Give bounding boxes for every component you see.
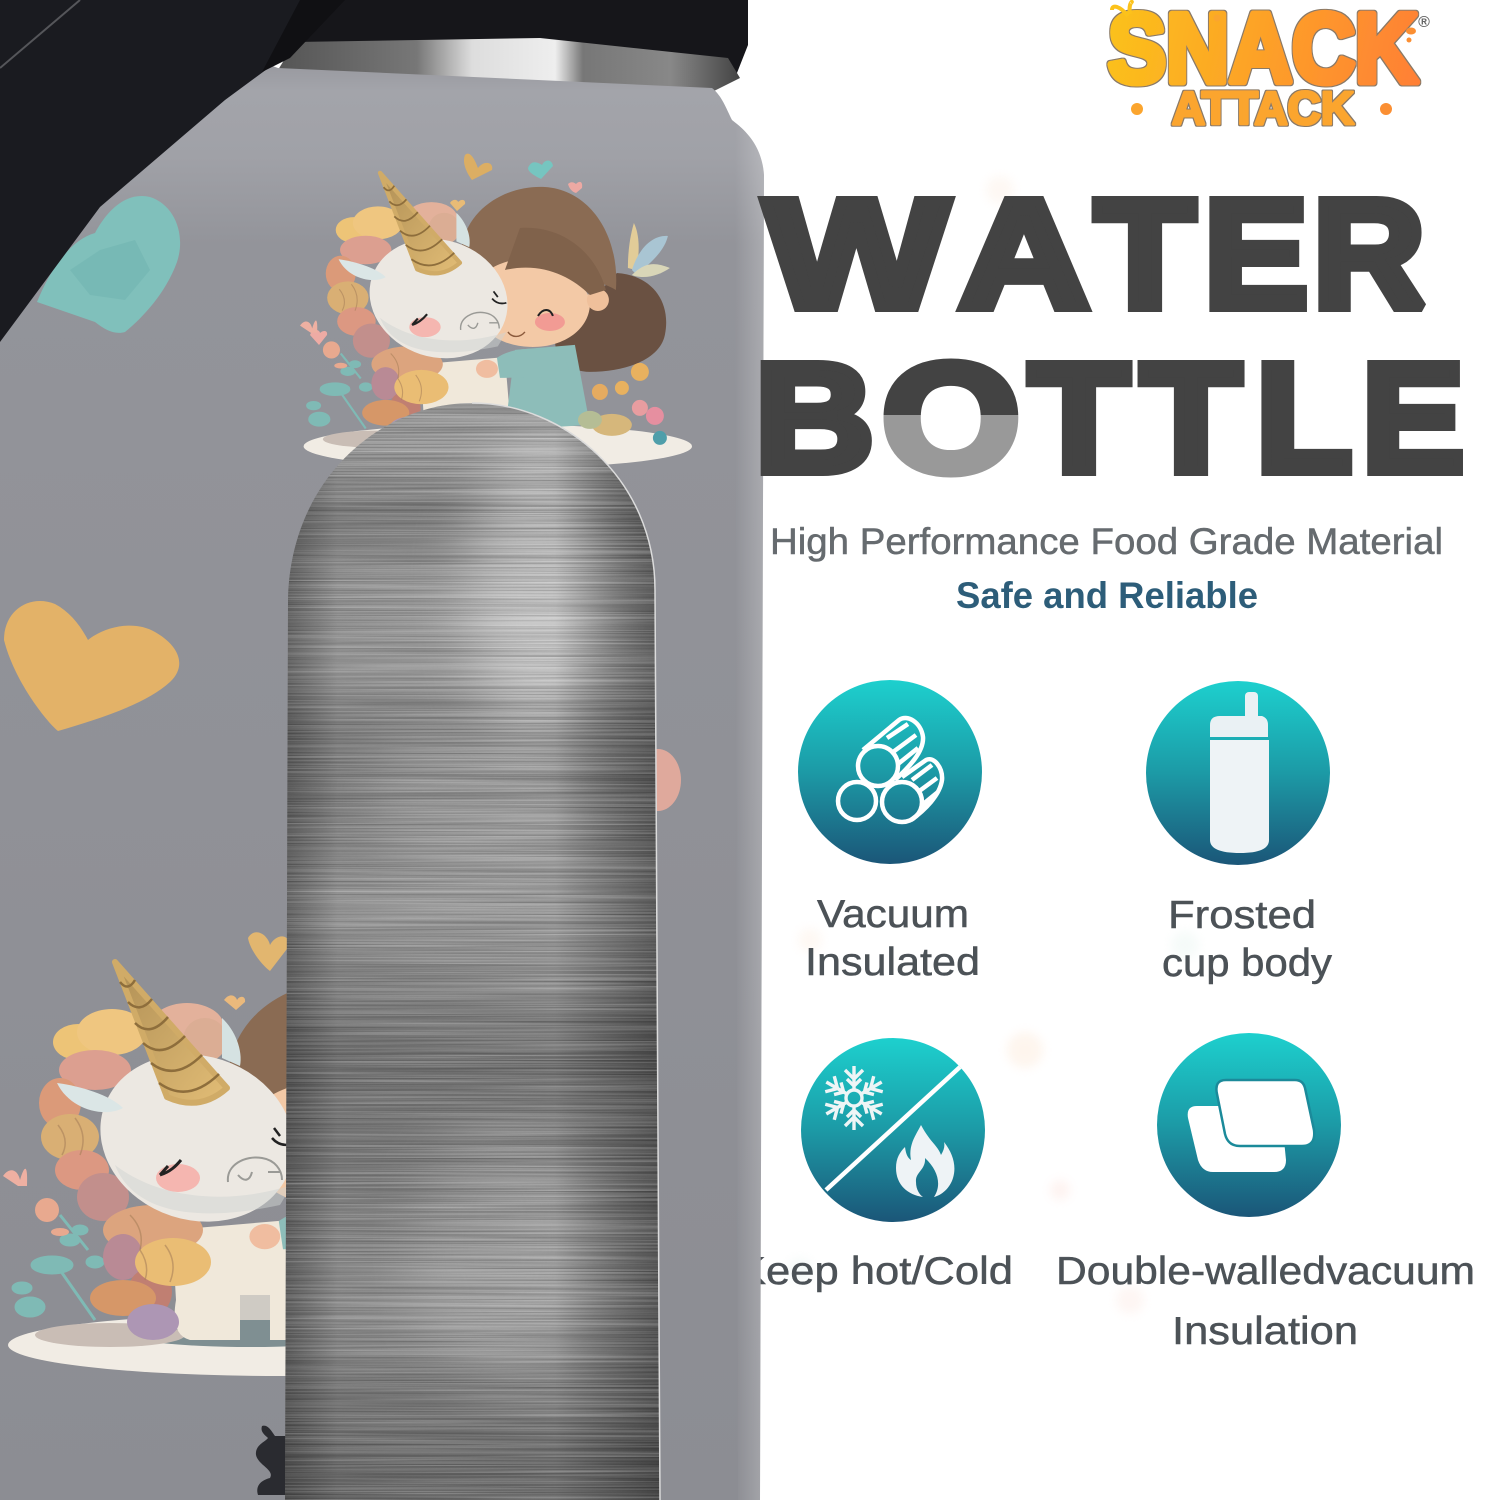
snowflake bbox=[822, 1066, 886, 1130]
flame bbox=[896, 1125, 954, 1197]
subtitle: material: High Performance Food Grade Material bbox=[770, 521, 1443, 562]
title: bottle: O bbox=[882, 332, 1020, 504]
heart: small gold bbox=[248, 932, 290, 971]
label: frosted: Frosted bbox=[1168, 894, 1316, 937]
faint confetti background bbox=[788, 176, 1199, 1314]
carrying strap bbox=[0, 0, 345, 342]
title: water: W bbox=[765, 168, 949, 340]
feature: vacuum insulated bbox=[798, 680, 982, 984]
title: bottle: B bbox=[755, 332, 874, 504]
bottle edge highlight bbox=[735, 124, 764, 1500]
brand logo bbox=[1108, 0, 1430, 134]
label: vacuum: Vacuum bbox=[817, 893, 969, 936]
label: cup body: cup body bbox=[1162, 942, 1333, 985]
steel neck band bbox=[278, 38, 740, 92]
icon: double wall layers bbox=[1157, 1033, 1341, 1217]
small unicorn and girl bbox=[300, 173, 692, 468]
icon: bottle bbox=[1146, 681, 1330, 865]
label: insulation: Insulation bbox=[1172, 1310, 1358, 1353]
logo: decorative dots bbox=[1131, 14, 1416, 115]
icon: hot and cold bbox=[801, 1038, 985, 1222]
label: double-walled vacuum: Double-walledvacuum bbox=[1056, 1250, 1475, 1293]
heart: small peach bbox=[224, 995, 245, 1010]
title: water: E bbox=[1204, 168, 1308, 340]
logo: registered mark: ® bbox=[1418, 14, 1430, 31]
heart: large gold bbox=[4, 601, 179, 731]
bottle lid bbox=[300, 0, 748, 78]
large unicorn and girl bbox=[3, 962, 552, 1376]
logo: antennae bbox=[1112, 2, 1132, 16]
title: bottle: T bbox=[1029, 332, 1129, 504]
hearts above small unicorn bbox=[310, 154, 582, 345]
heart: pink partial bbox=[635, 749, 681, 811]
label: insulated: Insulated bbox=[805, 941, 980, 984]
title: bottle: T bbox=[1141, 332, 1241, 504]
subtitle: safe and reliable: Safe and Reliable bbox=[956, 575, 1258, 616]
brand mark silhouette on bottle bbox=[256, 1426, 290, 1495]
text: keep hot/cold label: Keep hot/Cold bbox=[737, 1250, 1013, 1293]
heart: large teal bbox=[37, 196, 180, 333]
steel plate bbox=[280, 400, 665, 1500]
title: water: A bbox=[959, 168, 1089, 340]
title: water: T bbox=[1095, 168, 1195, 340]
title: water: R bbox=[1313, 168, 1425, 340]
title: bottle: L bbox=[1256, 332, 1352, 504]
bottle illustration bbox=[0, 0, 764, 1500]
icon: insulated tubes bbox=[798, 680, 982, 864]
logo: attack wordmark: ATTACK bbox=[1172, 82, 1354, 134]
feature: frosted cup body bbox=[1146, 681, 1333, 985]
bottle body bbox=[0, 40, 764, 1500]
title: bottle: E bbox=[1362, 332, 1464, 504]
